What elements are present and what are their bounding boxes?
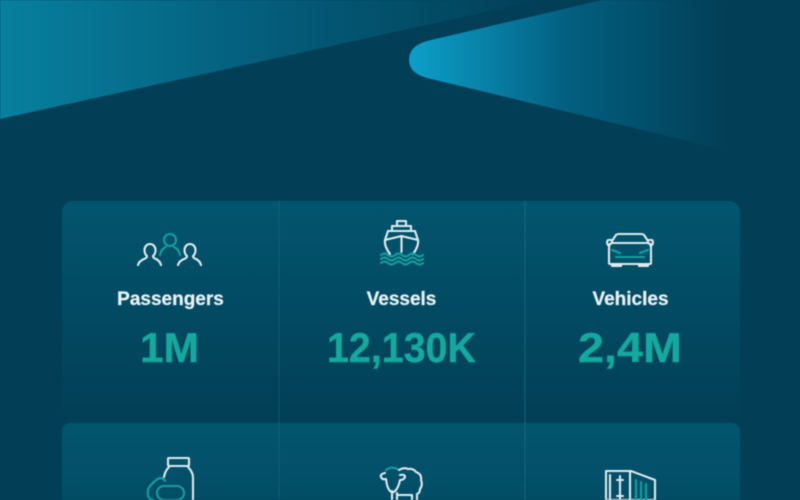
icon: jar and capsules [148,458,193,500]
icon: passengers [138,234,201,265]
value: 1M: 1M [140,324,199,371]
stat: containers [606,471,655,500]
panel: top stats row [62,201,740,423]
value: 2,4M: 2,4M [578,324,682,371]
icon: ship [381,221,423,264]
banner shape: right gradient beam [409,0,800,168]
icon: car [607,234,653,266]
panel: bottom stats row [62,423,740,500]
stat: vessels [327,221,476,371]
value: 12,130K: 12,130K [327,324,476,371]
label: Vehicles: Vehicles [592,289,669,310]
label: Passengers: Passengers [117,289,224,310]
stat: livestock [381,468,422,500]
label: Vessels: Vessels [367,289,436,310]
stat: passengers [117,234,224,371]
icon: sheep [381,468,422,500]
stat: vehicles [578,234,682,371]
banner shape: left gradient wedge [0,0,540,119]
icon: shipping container [606,471,655,500]
stat: freight jar [148,458,193,500]
